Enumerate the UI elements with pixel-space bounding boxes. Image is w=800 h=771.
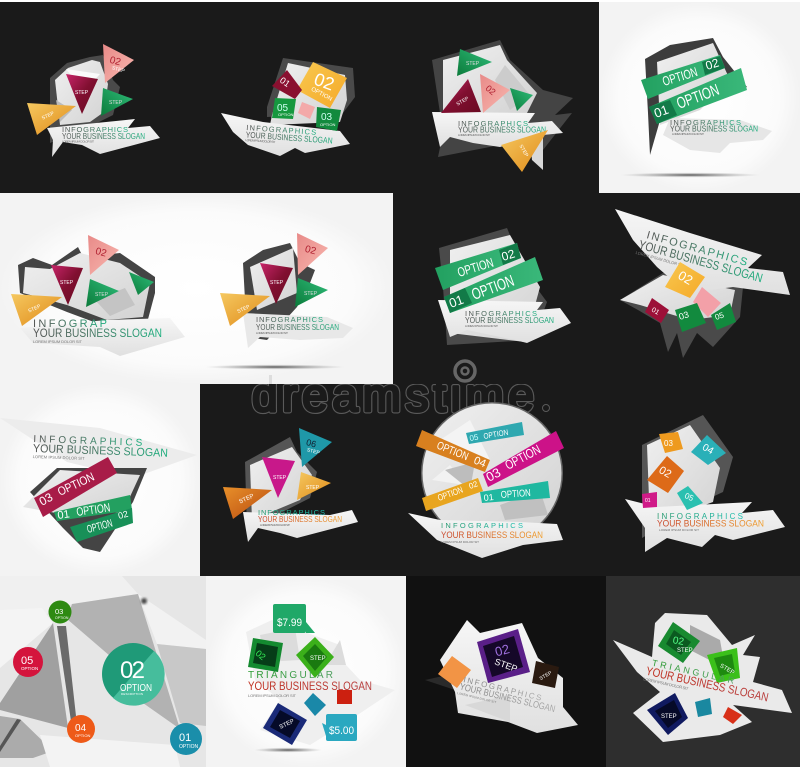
band 02: OPTION <box>436 485 464 503</box>
slogan: INFOGRAPHICS <box>465 309 537 318</box>
slogan <box>33 434 168 464</box>
panel: triangular squares infographic 16 <box>613 613 792 742</box>
triangle 04: STEP <box>306 485 320 491</box>
panel: white top right background <box>599 2 800 193</box>
panel: squares infographic 12 <box>625 415 785 552</box>
square teal <box>695 698 712 717</box>
band 02: 02 <box>704 55 721 73</box>
slogan: YOUR BUSINESS SLOGAN <box>458 682 556 715</box>
band 03: 03 <box>37 490 55 509</box>
triangle 06 <box>299 428 332 467</box>
square 01 <box>642 492 657 508</box>
square 03: 03 <box>678 309 690 322</box>
triangle maroon: STEP <box>60 280 74 286</box>
band 01 <box>649 68 747 124</box>
triangle 06: STEP <box>306 447 321 457</box>
slogan: YOUR BUSINESS SLOGAN <box>657 518 764 530</box>
slogan: LOREM IPSUM DOLOR SIT <box>457 691 497 704</box>
slogan: YOUR BUSINESS SLOGAN <box>258 514 342 524</box>
slogan: YOUR BUSINESS SLOGAN <box>645 664 770 704</box>
triangle small <box>129 272 154 295</box>
triangle 02 <box>88 235 119 275</box>
shadow <box>254 748 322 752</box>
band 02: OPTION <box>660 64 699 89</box>
slogan: INFOGRAPHICS <box>62 125 128 134</box>
band 01: 01 <box>57 508 71 522</box>
square 02: STEP <box>493 657 519 674</box>
shard <box>530 132 543 170</box>
slogan: YOUR BUSINESS SLOGAN <box>441 530 543 541</box>
band 02: 02 <box>500 246 517 264</box>
square 02: 02 <box>311 69 337 95</box>
panel: squares infographic 8 <box>615 209 790 358</box>
square 05 <box>272 98 296 119</box>
slogan: LOREM IPSUM DOLOR SIT <box>33 339 83 344</box>
square 02: 02 <box>675 268 695 288</box>
slogan <box>458 119 546 137</box>
circle 05: 05 <box>21 655 33 667</box>
square 02 <box>248 638 283 672</box>
triangle magenta: STEP <box>273 475 287 481</box>
circle 01: OPTION <box>179 744 199 750</box>
square 02: 02 <box>493 641 511 659</box>
slogan: YOUR BUSINESS SLOGAN <box>256 322 339 332</box>
triangle 01 <box>220 293 270 326</box>
panel: triangles infographic 3 <box>432 40 573 172</box>
slogan: LOREM IPSUM DOLOR SIT <box>256 331 288 335</box>
band 05: OPTION <box>483 428 509 441</box>
slogan <box>457 674 558 718</box>
band 04 <box>416 430 490 472</box>
triangle maroon: STEP <box>456 95 470 107</box>
panel: dark top background <box>0 2 599 193</box>
band 02: 02 <box>468 479 480 491</box>
band 01: 01 <box>483 492 494 503</box>
square 05: 05 <box>683 491 696 503</box>
square 04 <box>298 102 315 119</box>
circle 05: OPTION <box>21 666 38 671</box>
triangle maroon <box>260 263 293 304</box>
square 01: 01 <box>645 498 651 504</box>
slogan <box>635 228 767 289</box>
triangle orange <box>501 130 548 172</box>
panel: triangles infographic 5 <box>11 235 185 356</box>
panel: gray circles background <box>0 576 206 767</box>
price callout 7.99 <box>273 604 315 633</box>
circle 02: DESCRIPTION <box>121 692 143 696</box>
slogan <box>258 508 342 527</box>
panel: step squares infographic 15 <box>425 620 578 733</box>
band 03 <box>483 431 564 487</box>
watermark: dreamstime logo: dreamstime <box>252 369 534 421</box>
slogan: YOUR BUSINESS SLOGAN <box>245 130 333 146</box>
triangle 02: 02 <box>304 244 318 257</box>
slogan: INFOGRAPHICS <box>657 512 743 521</box>
triangle maroon <box>441 79 481 113</box>
price callout 5.00 <box>322 714 357 741</box>
square step navy: STEP <box>279 719 295 731</box>
square brown <box>532 661 559 688</box>
panel: triangles infographic 1 <box>27 44 160 157</box>
triangle 04: STEP <box>304 291 318 297</box>
square 02 <box>477 629 530 683</box>
triangle 02: 02 <box>484 83 498 97</box>
square red <box>723 707 742 724</box>
square 05: OPTION <box>278 112 293 117</box>
band 02: 02 <box>117 509 129 521</box>
slogan <box>248 670 372 698</box>
slogan <box>256 315 339 335</box>
band 02 <box>422 478 483 511</box>
triangle 02 <box>297 233 328 275</box>
panel: bands infographic 9 <box>0 418 197 552</box>
circle 01: 01 <box>179 732 191 744</box>
slogan: YOUR BUSINESS SLOGAN <box>637 238 764 285</box>
slogan: TRIANGULAR <box>651 658 736 686</box>
slogan: INFOGRAPHICS <box>670 118 741 127</box>
band 02: OPTION <box>86 518 114 536</box>
square 03: STEP <box>310 656 326 662</box>
slogan: LOREM IPSUM DOLOR SIT <box>62 140 94 144</box>
triangle 02: 02 <box>108 55 122 68</box>
band 04: 04 <box>472 455 488 470</box>
slogan: LOREM IPSUM DOLOR SIT <box>672 132 704 136</box>
square 04 <box>691 435 726 465</box>
panel: white triangular background <box>206 576 406 767</box>
price callout 7.99: $7.99 <box>277 617 302 629</box>
triangle small <box>510 88 533 111</box>
square 02 <box>658 622 700 663</box>
slogan: LOREM IPSUM DOLOR SIT <box>245 138 276 144</box>
circle 05 <box>13 647 43 677</box>
band 02: OPTION <box>455 255 495 280</box>
circle 04: OPTION <box>75 733 90 738</box>
square 03: OPTION <box>320 122 335 127</box>
slogan: YOUR BUSINESS SLOGAN <box>62 131 145 141</box>
square 04 <box>693 287 721 317</box>
square 05 <box>677 486 703 510</box>
square 02: STEP <box>677 648 693 654</box>
slogan: YOUR BUSINESS SLOGAN <box>458 124 546 134</box>
triangle 04: STEP <box>466 61 480 67</box>
panel: squares infographic 2 <box>221 58 355 156</box>
panel: sphere bands infographic 11 <box>408 402 564 558</box>
panel: triangles infographic 10 <box>223 428 358 542</box>
band 01 <box>444 257 543 313</box>
triangle maroon: STEP <box>270 280 284 286</box>
slogan: LOREM IPSUM DOLOR SIT <box>441 540 479 544</box>
square 03 <box>659 432 683 453</box>
circle 04: 04 <box>75 723 87 734</box>
band 02 <box>70 508 133 542</box>
square 03 <box>707 648 740 683</box>
circle 03: 03 <box>55 607 63 616</box>
square navy <box>647 693 688 735</box>
slogan <box>441 521 543 544</box>
panel: triangles infographic 6 <box>205 233 353 370</box>
band 05: 05 <box>469 432 480 443</box>
circle 02 <box>102 643 165 706</box>
triangle 01: STEP <box>27 303 42 314</box>
panel: bands infographic 4 <box>620 38 772 178</box>
square 02 <box>665 262 705 298</box>
band 02 <box>641 55 725 99</box>
triangle maroon <box>51 265 83 305</box>
band 01: OPTION <box>500 488 531 501</box>
circle 02: OPTION <box>120 683 152 694</box>
slogan: LOREM IPSUM DOLOR SIT <box>643 676 689 691</box>
slogan <box>62 125 145 144</box>
square 03 <box>296 637 334 678</box>
triangle 06: 06 <box>305 437 317 449</box>
slogan: INFOGRAPHICS <box>441 521 523 530</box>
square 01: 01 <box>650 307 660 317</box>
triangle 04 <box>86 279 119 307</box>
circle 04 <box>67 715 95 743</box>
square 03 <box>316 107 341 131</box>
band 01 <box>480 481 550 503</box>
triangle 04 <box>295 278 328 307</box>
square red <box>337 690 352 704</box>
panel: charcoal background <box>606 576 800 767</box>
triangle 01 <box>11 294 62 326</box>
sphere <box>422 404 562 542</box>
square 05 <box>711 303 736 330</box>
square teal <box>304 693 326 716</box>
shadow <box>620 172 760 178</box>
square 03: 03 <box>321 112 333 123</box>
square navy: STEP <box>661 714 677 720</box>
square 05: 05 <box>277 103 289 114</box>
circle 03: OPTION <box>55 616 69 620</box>
slogan: LOREM IPSUM DOLOR SIT <box>659 528 699 532</box>
slogan: INFOGRAPHICS <box>256 315 323 324</box>
slogan: INFOGRAPHICS <box>258 508 325 517</box>
square 02: 02 <box>672 635 685 648</box>
square 02: 02 <box>254 648 268 662</box>
square 04: 04 <box>700 442 716 457</box>
panel: triangular squares infographic 14 <box>246 604 395 752</box>
triangle 01: STEP <box>236 304 251 315</box>
square 02 <box>297 62 347 108</box>
panel: white row two background <box>0 193 393 384</box>
slogan: INFOGRAPHICS <box>33 434 143 449</box>
triangle 02 <box>103 44 134 83</box>
slogan: LOREM IPSUM DOLOR SIT <box>260 523 290 527</box>
triangle 02: STEP <box>111 65 126 75</box>
slogan: YOUR BUSINESS SLOGAN <box>33 326 162 340</box>
square 02 <box>647 456 684 493</box>
circle 02: 02 <box>120 657 145 684</box>
slogan: LOREM IPSUM DOLOR SIT <box>635 250 685 268</box>
panel: circles infographic 13 <box>0 576 206 767</box>
band 01 <box>54 495 132 522</box>
slogan: INFOGRAPHICS <box>246 123 316 137</box>
slogan: INFOGRAP <box>33 318 107 330</box>
square 02: OPTION <box>310 87 333 103</box>
slogan: INFOGRAPHICS <box>645 229 749 269</box>
square orange <box>438 656 471 688</box>
square 02: 02 <box>657 464 673 481</box>
square step navy <box>263 703 307 745</box>
triangle 04: STEP <box>109 100 123 106</box>
slogan: INFOGRAPHICS <box>463 675 542 703</box>
shadow <box>205 364 345 370</box>
slogan: LOREM IPSUM DOLOR SIT <box>458 133 490 137</box>
band 05 <box>466 422 524 444</box>
circle 03 <box>48 600 72 624</box>
square 03: 03 <box>664 439 673 448</box>
panel: bands infographic 7 <box>435 228 571 345</box>
triangle 01: STEP <box>41 110 56 122</box>
triangle 02 <box>480 74 510 113</box>
slogan <box>657 512 764 532</box>
slogan: TRIANGULAR <box>248 670 333 681</box>
band 01: OPTION <box>75 500 111 519</box>
slogan: YOUR BUSINESS SLOGAN <box>670 124 758 134</box>
watermark: dreamstime logo: dreamstime <box>252 369 534 421</box>
triangle 02: 02 <box>94 246 108 260</box>
triangle 04 <box>457 49 492 76</box>
triangle 03: STEP <box>75 90 89 96</box>
slogan: YOUR BUSINESS SLOGAN <box>33 443 168 460</box>
panel: white left background <box>0 384 200 576</box>
slogan: YOUR BUSINESS SLOGAN <box>465 315 554 325</box>
panel: dark middle background <box>200 193 800 576</box>
panel: black background <box>406 576 606 767</box>
slogan <box>670 118 758 136</box>
band 01: 01 <box>447 292 466 311</box>
band 03: OPTION <box>55 470 97 499</box>
square 01: 01 <box>278 75 292 89</box>
slogan <box>465 309 554 328</box>
band 01: 01 <box>652 102 671 121</box>
slogan: LOREM IPSUM DOLOR SIT <box>248 693 297 698</box>
square brown: STEP <box>539 670 554 682</box>
triangle 04: STEP <box>95 292 109 298</box>
slogan: LOREM IPSUM DOLOR SIT <box>465 324 498 328</box>
circle 01 <box>170 723 202 755</box>
square 03: STEP <box>719 663 735 676</box>
band 04: OPTION <box>435 440 470 463</box>
band 03: 03 <box>483 465 503 485</box>
square 05: 05 <box>714 310 726 322</box>
slogan <box>245 123 333 148</box>
square 03 <box>675 303 706 332</box>
band 03 <box>34 457 117 517</box>
band 03: OPTION <box>502 442 543 473</box>
band 01: OPTION <box>675 82 722 113</box>
triangle orange: STEP <box>518 144 530 159</box>
slogan: YOUR BUSINESS SLOGAN <box>248 679 372 693</box>
band 02 <box>435 243 521 290</box>
triangle 01: STEP <box>238 493 255 505</box>
price callout 5.00: $5.00 <box>329 725 354 737</box>
slogan: INFOGRAPHICS <box>458 119 528 128</box>
slogan <box>33 318 162 344</box>
band 01: OPTION <box>470 273 517 304</box>
square 01 <box>645 298 669 323</box>
slogan: LOREM IPSUM DOLOR SIT <box>33 454 85 461</box>
